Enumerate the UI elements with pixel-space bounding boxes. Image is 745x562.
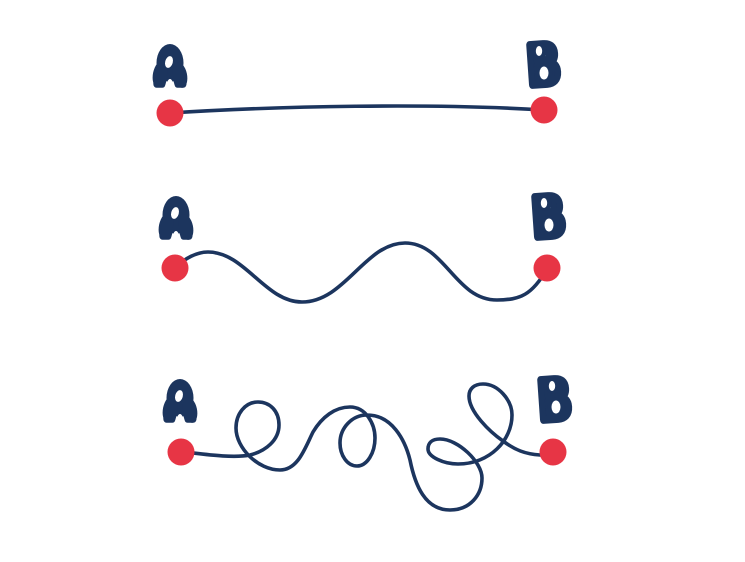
point B dot [530, 96, 558, 124]
letter A: A [156, 39, 184, 95]
row 1: straight path [150, 30, 562, 127]
tangled line [193, 384, 540, 510]
letter A: A [162, 191, 190, 247]
letter B: B [536, 365, 573, 432]
point A dot [162, 254, 188, 282]
row 2: wavy path [156, 182, 567, 302]
wavy line [175, 243, 547, 302]
straight line [170, 106, 544, 113]
letter A: A [166, 374, 194, 430]
point A dot [168, 438, 194, 466]
point B dot [534, 254, 560, 282]
row 3: tangled path [160, 365, 573, 510]
letter B: B [530, 182, 567, 249]
point B dot [540, 438, 566, 466]
point A dot [156, 100, 184, 126]
letter B: B [525, 30, 562, 97]
